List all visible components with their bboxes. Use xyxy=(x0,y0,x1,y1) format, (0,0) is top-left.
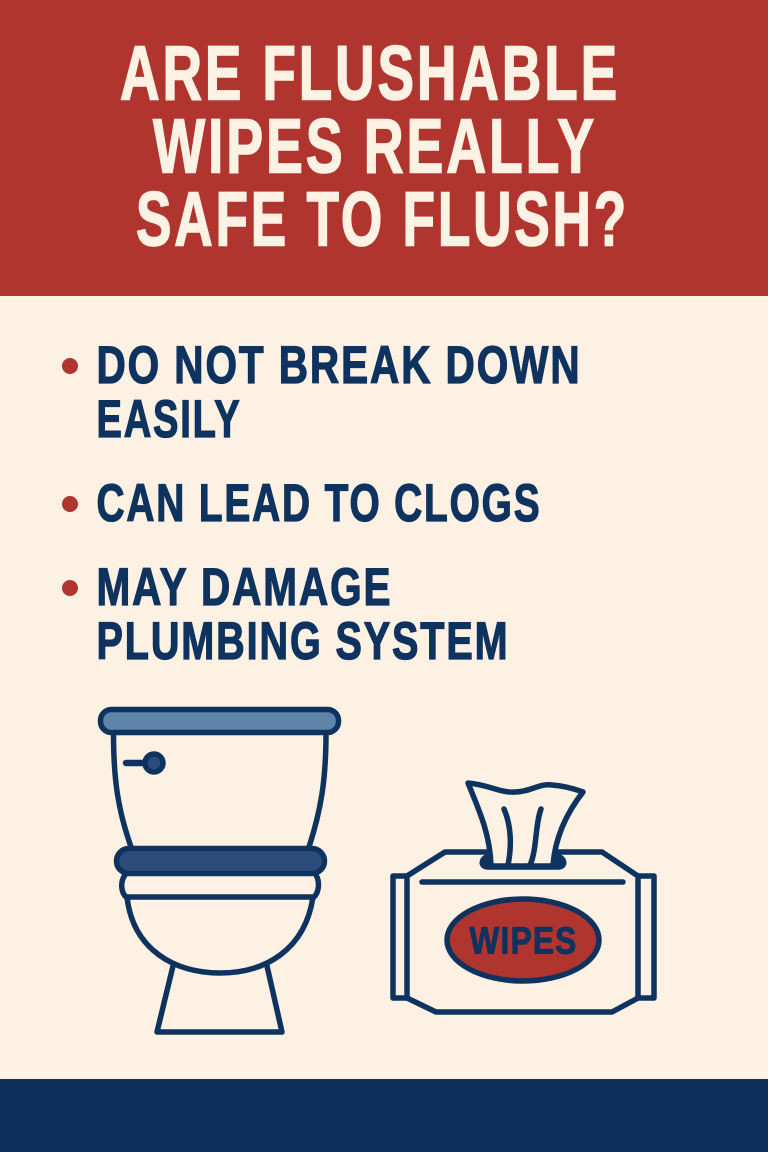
toilet tank lid xyxy=(100,710,338,732)
bullet: may damage plumbing system: MAY DAMAGE xyxy=(96,558,392,617)
package opening xyxy=(482,856,564,867)
icon: wipes package xyxy=(393,783,654,1012)
icon: toilet xyxy=(100,710,338,1032)
toilet bowl xyxy=(127,897,313,973)
wipe tissue xyxy=(468,783,583,866)
header band xyxy=(0,0,768,296)
toilet base xyxy=(157,966,282,1032)
bullet list xyxy=(62,336,582,671)
package body xyxy=(407,852,638,1012)
bullet: may damage plumbing system: PLUMBING SYSTEM xyxy=(96,612,510,671)
wipes label: WIPES xyxy=(470,920,578,962)
toilet seat xyxy=(116,848,324,874)
toilet tank xyxy=(114,733,326,847)
package seam line xyxy=(422,879,623,885)
bullet: may damage plumbing system xyxy=(62,558,510,671)
title: WIPES REALLY xyxy=(153,104,597,190)
package side flaps xyxy=(393,876,654,998)
title xyxy=(120,30,629,262)
toilet flush handle xyxy=(126,754,163,772)
bullet: can lead to clogs xyxy=(62,474,542,533)
bullet: do not break down easily xyxy=(62,336,582,449)
footer band xyxy=(0,1079,768,1152)
bullet: do not break down easily: EASILY xyxy=(96,390,242,449)
bullet: do not break down easily: DO NOT BREAK DOWN xyxy=(96,336,582,395)
wipes label xyxy=(447,899,599,981)
bullet: can lead to clogs: CAN LEAD TO CLOGS xyxy=(96,474,542,533)
toilet rim xyxy=(122,875,318,897)
